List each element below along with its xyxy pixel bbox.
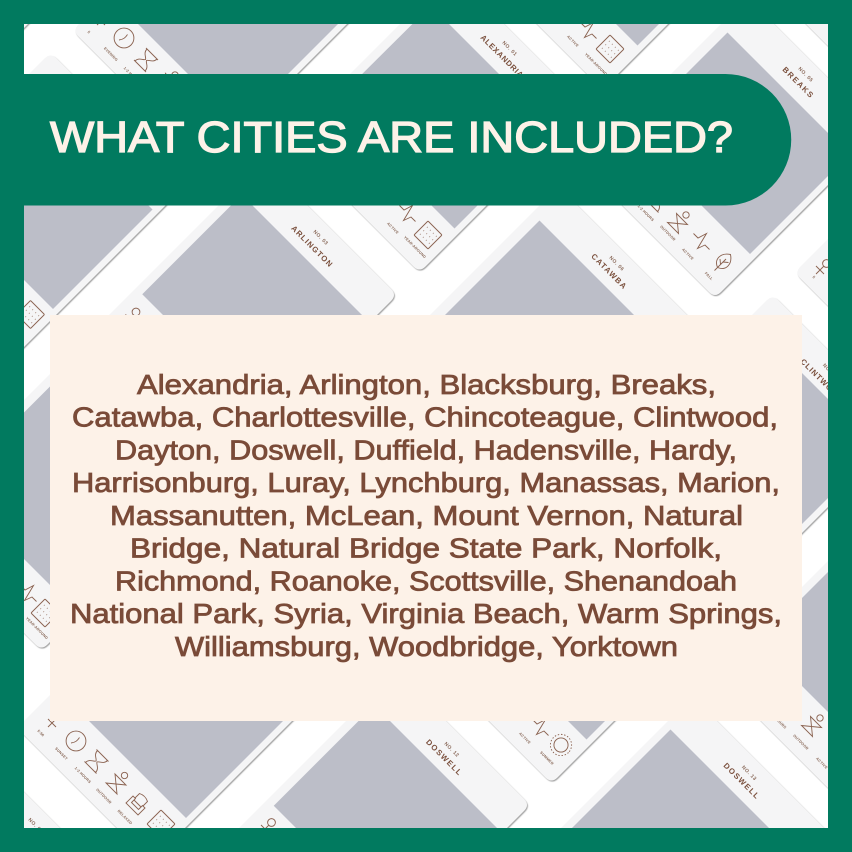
card: Doswell no. 12: NO. 12 bbox=[443, 741, 460, 759]
card: top-left corner bbox=[16, 16, 36, 36]
card: Blacksburg band upper card: YEAR-AROUND bbox=[584, 52, 608, 76]
card: Arlington bbox=[100, 164, 394, 458]
card: left middle card: YEAR-AROUND bbox=[25, 616, 49, 640]
text block: list of cities: Harrisonburg, Luray, Lynchburg, Manassas, Marion, bbox=[72, 467, 780, 498]
card: Breaks: FALL bbox=[704, 271, 714, 282]
title: WHAT CITIES ARE INCLUDED? bbox=[50, 114, 733, 162]
card: evening card: EVENING bbox=[103, 47, 118, 62]
card: Blacksburg band upper card: ACTIVE bbox=[566, 35, 580, 48]
card: right upper card: 5 bbox=[811, 275, 816, 280]
card: Breaks bbox=[581, 16, 836, 295]
card: Breaks: OUTDOOR bbox=[659, 225, 676, 242]
text block: list of cities: Dayton, Doswell, Duffield, Hadensville, Hardy, bbox=[115, 434, 737, 466]
card: right upper card bbox=[798, 231, 836, 314]
card: Arlington: ARLINGTON bbox=[289, 224, 334, 269]
card: bottom-left card: SUNSET bbox=[54, 747, 69, 761]
card: Breaks: ACTIVE bbox=[681, 248, 695, 261]
text block: list of cities bbox=[70, 369, 782, 662]
card: bottom-left corner bbox=[16, 784, 68, 836]
card: bottom-left card: 1-2 HOURS bbox=[74, 766, 92, 785]
text block: list of cities: Massanutten, McLean, Mount Vernon, Natural bbox=[110, 500, 743, 531]
panel: city list background bbox=[50, 315, 802, 721]
text block: list of cities: Richmond, Roanoke, Scottsville, Shenandoah bbox=[115, 566, 737, 596]
text block: list of cities: Bridge, Natural Bridge State Park, Norfolk, bbox=[130, 533, 722, 564]
card: Catawba bbox=[392, 186, 692, 487]
card: summer card bbox=[418, 483, 718, 780]
card: Doswell no. 12: DOSWELL bbox=[424, 738, 464, 777]
card: right lower card bbox=[714, 553, 836, 796]
card: Alexandria: YEAR-AROUND bbox=[403, 235, 427, 259]
card: Alexandria bbox=[286, 16, 586, 270]
card: Arlington: NO. 03 bbox=[312, 229, 329, 247]
text block: list of cities: National Park, Syria, Virginia Beach, Warm Springs, bbox=[70, 598, 782, 629]
header banner bbox=[20, 74, 791, 206]
card: Doswell no. 13: DOSWELL bbox=[722, 761, 761, 801]
text block: list of cities: Catawba, Charlottesville, Chincoteague, Clintwood, bbox=[72, 402, 778, 433]
text block: list of cities: Williamsburg, Woodbridge, Yorktown bbox=[175, 631, 678, 662]
card: Catawba: CATAWBA bbox=[589, 252, 628, 291]
card: Blacksburg band upper card bbox=[529, 16, 676, 90]
card: Clintwood bbox=[606, 298, 844, 595]
card: bottom-left card bbox=[17, 540, 340, 838]
card: Breaks: NO. 05 bbox=[797, 66, 814, 84]
card: evening card: 1-2 HOURS bbox=[123, 66, 141, 85]
card: bottom-left card: 5:56 bbox=[36, 729, 45, 738]
card: bottom-left card: RELAXED bbox=[117, 809, 133, 826]
card: Doswell no. 13 bbox=[553, 696, 826, 836]
card: Clintwood: CLINTWOOD bbox=[799, 357, 844, 403]
card: Doswell no. 13: NO. 13 bbox=[740, 765, 757, 782]
card: Breaks: BREAKS bbox=[781, 65, 815, 99]
card: Doswell no. 12 bbox=[231, 671, 527, 837]
card: Alexandria: ALEXANDRIA bbox=[479, 33, 525, 80]
card: top-right corner bbox=[798, 16, 836, 54]
card: Alexandria: NO. 01 bbox=[501, 40, 518, 58]
card: Alexandria: ACTIVE bbox=[386, 222, 400, 235]
card: Catawba: NO. 06 bbox=[608, 255, 625, 273]
card: summer card: SUMMER bbox=[539, 751, 554, 766]
card: bottom-left corner: NO. 07 bbox=[27, 817, 44, 835]
card: right lower card: OUTDOOR bbox=[792, 734, 809, 751]
card: summer card: ACTIVE bbox=[518, 732, 532, 745]
card: bottom-left card: OUTDOOR bbox=[95, 788, 112, 805]
card: evening card bbox=[76, 8, 355, 165]
text block: list of cities: Alexandria, Arlington, Blacksburg, Breaks, bbox=[137, 369, 716, 400]
card: right lower card: HOURS bbox=[774, 717, 787, 730]
card: left lower band card bbox=[16, 56, 182, 355]
card: Clintwood: NO. 08 bbox=[821, 363, 838, 380]
card: left middle card bbox=[15, 353, 208, 648]
card: evening card: 5 bbox=[86, 30, 91, 35]
card: right lower card: ACTIVE bbox=[815, 757, 829, 770]
card: Breaks: 1-2 HOURS bbox=[637, 204, 655, 223]
